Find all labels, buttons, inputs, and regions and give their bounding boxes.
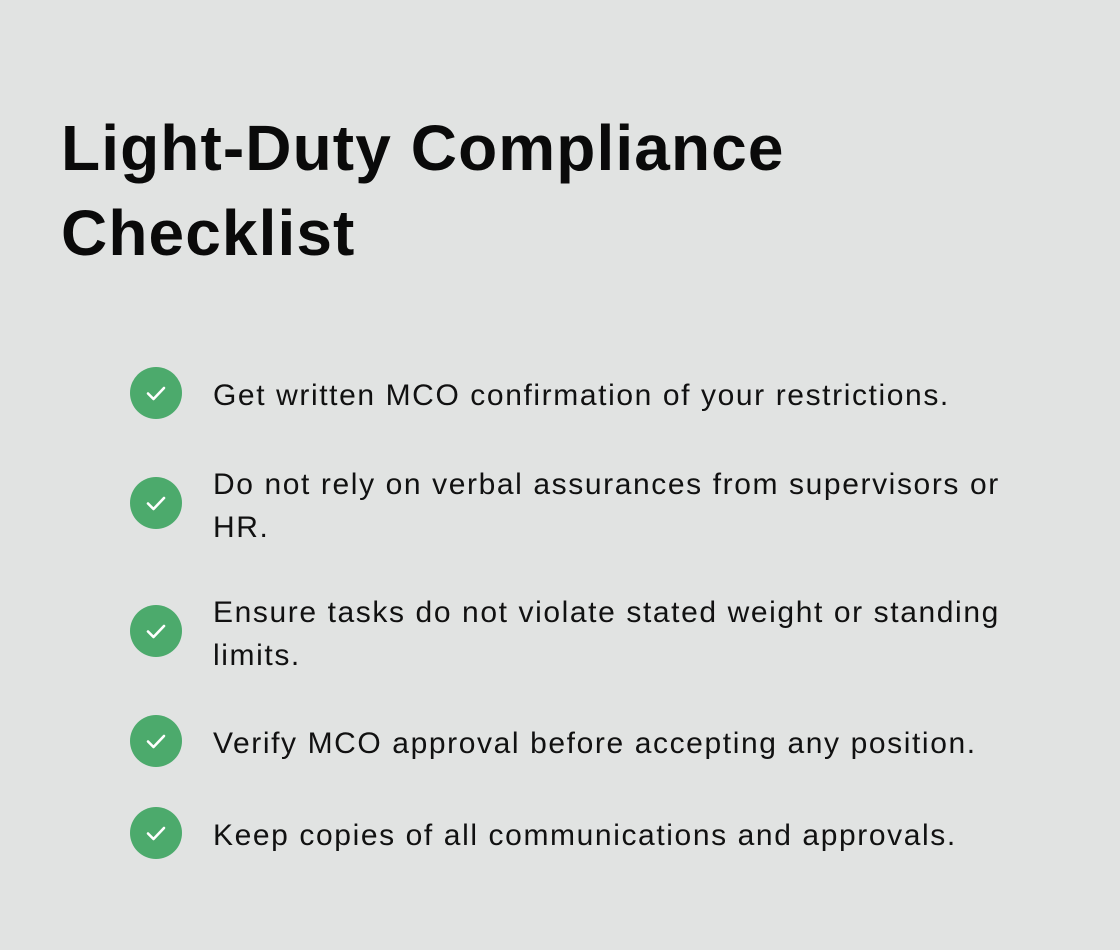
icon: check <box>130 367 182 419</box>
text: item 4: Verify MCO approval before accepting any position. <box>213 727 977 760</box>
icon: check <box>130 605 182 657</box>
icon: check <box>130 477 182 529</box>
text: item 1: Get written MCO confirmation of your restrictions. <box>213 379 950 412</box>
title: Checklist <box>61 197 355 269</box>
icon: check <box>130 715 182 767</box>
text: item 2: Do not rely on verbal assurances from supervisors or HR. <box>213 468 1000 544</box>
checklist item 1 <box>130 367 950 419</box>
title <box>61 112 785 269</box>
checklist item 4 <box>130 715 977 767</box>
title: Light-Duty Compliance <box>61 112 785 184</box>
text: item 5: Keep copies of all communications and approvals. <box>213 819 957 852</box>
icon: check <box>130 807 182 859</box>
text: item 3: Ensure tasks do not violate stated weight or standing limits. <box>213 596 1000 672</box>
checklist item 3 <box>130 596 1000 672</box>
checklist item 5 <box>130 807 957 859</box>
checklist item 2 <box>130 468 1000 544</box>
